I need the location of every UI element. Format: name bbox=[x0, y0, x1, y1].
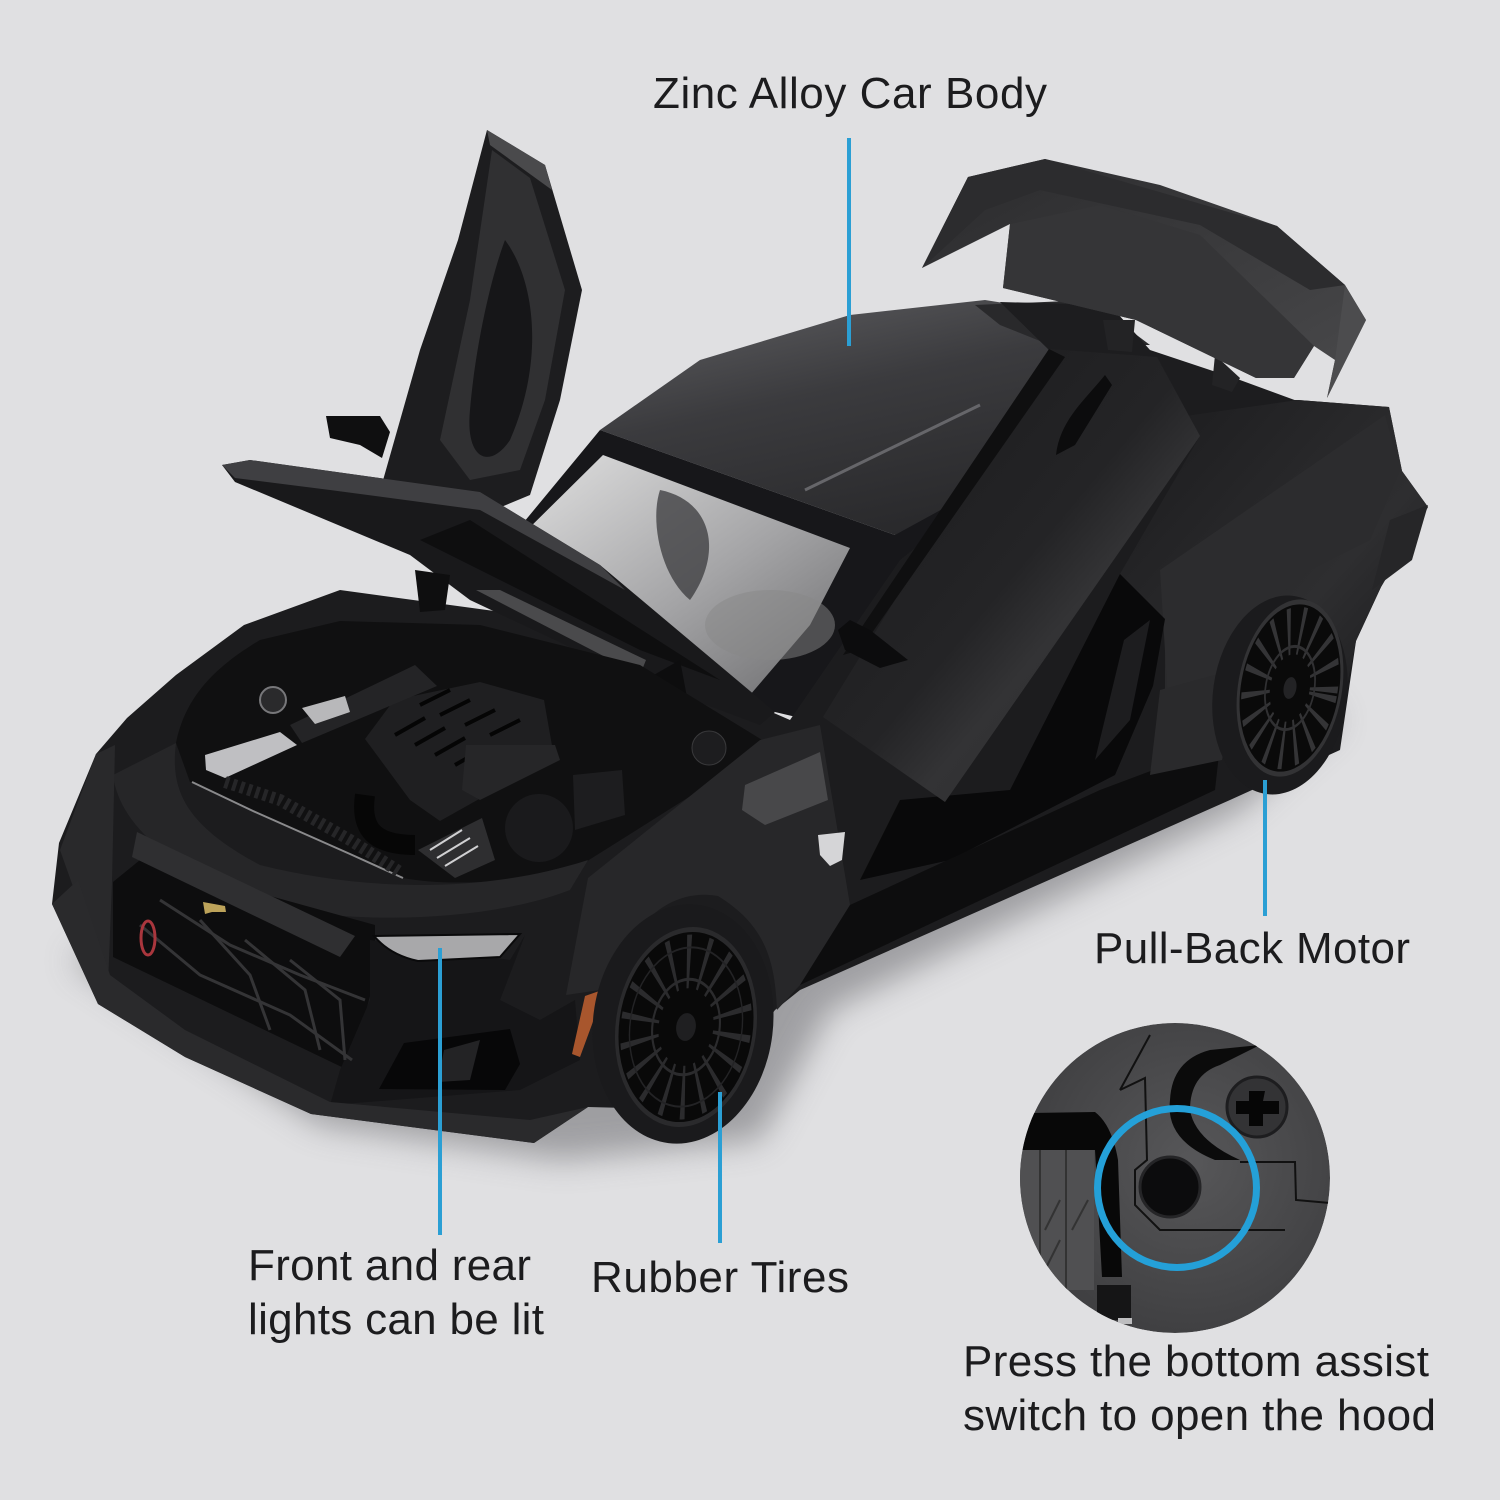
label: lights: lights can be lit bbox=[248, 1295, 544, 1344]
callout line: rubber tires bbox=[718, 1092, 722, 1243]
silver plate bbox=[418, 818, 495, 878]
upper nose band bbox=[132, 832, 355, 957]
left front bumper bbox=[60, 745, 115, 985]
splitter bbox=[52, 880, 588, 1143]
label: zinc alloy car body: Zinc Alloy Car Body bbox=[653, 69, 1047, 118]
car model illustration bbox=[52, 130, 1428, 1154]
label: lights: Front and rear bbox=[248, 1241, 531, 1290]
hood surround band bbox=[113, 743, 588, 918]
front fascia bbox=[52, 745, 605, 1143]
right gull-wing door bbox=[823, 349, 1200, 802]
callout line: lights bbox=[438, 948, 442, 1235]
left mirror bbox=[326, 416, 390, 458]
rear deck behind door bbox=[1000, 302, 1300, 430]
label: lights bbox=[248, 1241, 544, 1344]
transformers badge bbox=[818, 832, 845, 866]
roof bbox=[600, 300, 1200, 560]
rear wheel bbox=[1200, 587, 1360, 803]
gold bowtie bbox=[203, 902, 226, 914]
front wheel bbox=[579, 894, 787, 1154]
label: rubber tires: Rubber Tires bbox=[591, 1253, 849, 1302]
right door mirror bbox=[838, 620, 908, 668]
red tow ring bbox=[141, 921, 155, 955]
label: assist switch bbox=[963, 1337, 1436, 1440]
reservoir silver bbox=[205, 732, 297, 778]
label: assist switch: switch to open the hood bbox=[963, 1391, 1436, 1440]
black intake hose bbox=[364, 795, 415, 845]
orange side marker bbox=[572, 989, 605, 1057]
fender and door sill bbox=[566, 725, 850, 1010]
label: assist switch: Press the bottom assist bbox=[963, 1337, 1429, 1386]
grille bbox=[140, 900, 365, 1060]
windshield glass bbox=[512, 455, 850, 695]
rear spoiler bbox=[922, 159, 1366, 398]
car main body bbox=[52, 400, 1428, 1143]
inset: assist switch photo bbox=[1020, 1023, 1330, 1333]
engine cover bbox=[365, 682, 554, 821]
left gull-wing door bbox=[326, 130, 582, 520]
headlight bbox=[374, 934, 520, 961]
open hood bbox=[222, 460, 775, 745]
engine bay bbox=[176, 621, 767, 883]
cabin frame bbox=[505, 430, 1050, 725]
callout line: car body bbox=[847, 138, 851, 346]
callout line: pull-back motor bbox=[1263, 780, 1267, 916]
side vent bbox=[742, 752, 828, 825]
lower intake bbox=[379, 1029, 520, 1090]
door opening bbox=[860, 574, 1165, 880]
rear quarter panel bbox=[1120, 400, 1428, 750]
car shadow bbox=[70, 680, 1340, 1160]
inset highlight ring bbox=[1098, 1108, 1256, 1268]
label: pull-back motor: Pull-Back Motor bbox=[1094, 924, 1410, 973]
